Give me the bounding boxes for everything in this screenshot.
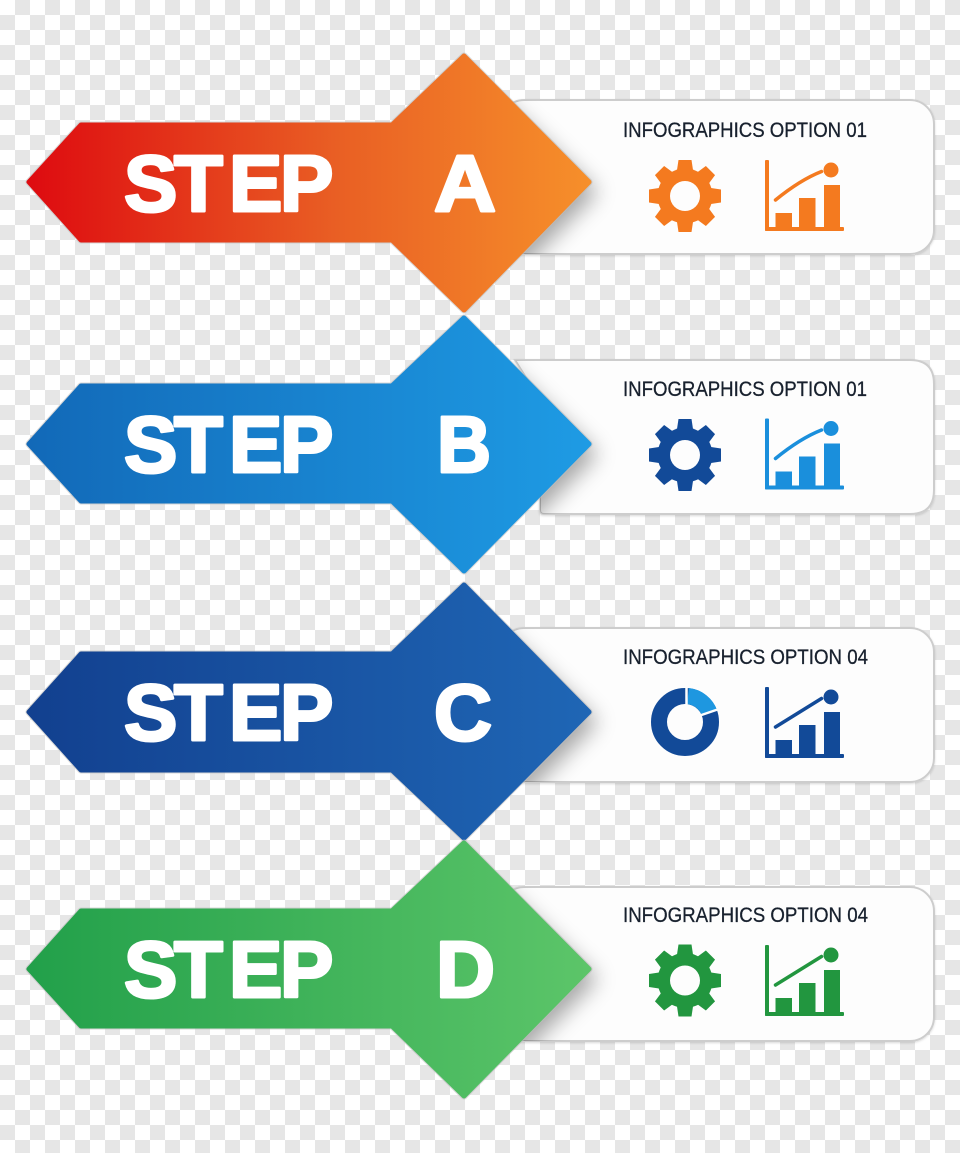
icon: gear D xyxy=(649,944,721,1016)
label: step D word: STEP xyxy=(124,925,333,1014)
arrow: step D xyxy=(29,843,589,1096)
panel: option card A xyxy=(513,99,936,257)
icon: bar chart D xyxy=(765,945,844,1016)
label: letter B: B xyxy=(437,400,491,489)
label: step B word: STEP xyxy=(124,400,333,489)
arrow: step C xyxy=(29,585,589,838)
icon: bar chart B xyxy=(765,418,844,490)
panel: option card B xyxy=(513,359,936,517)
heading: option B: INFOGRAPHICS OPTION 01 xyxy=(623,378,867,401)
icon: bar chart A xyxy=(765,160,844,231)
heading: option A: INFOGRAPHICS OPTION 01 xyxy=(623,119,867,142)
arrow: step B xyxy=(29,318,589,571)
icon: gear A xyxy=(649,160,721,232)
icon: bar chart C xyxy=(765,687,844,758)
label: letter A: A xyxy=(434,139,496,228)
label: step A word: STEP xyxy=(124,139,333,228)
heading: option C: INFOGRAPHICS OPTION 04 xyxy=(623,646,868,669)
panel: option card C xyxy=(512,627,936,785)
label: letter C: C xyxy=(434,668,492,757)
label: step C word: STEP xyxy=(124,668,333,757)
label: letter D: D xyxy=(436,925,495,1014)
panel: option card D xyxy=(513,886,936,1044)
icon: gear B xyxy=(649,419,721,491)
heading: option D: INFOGRAPHICS OPTION 04 xyxy=(623,904,868,927)
arrow: step A xyxy=(29,56,589,310)
icon: donut chart xyxy=(659,687,719,748)
